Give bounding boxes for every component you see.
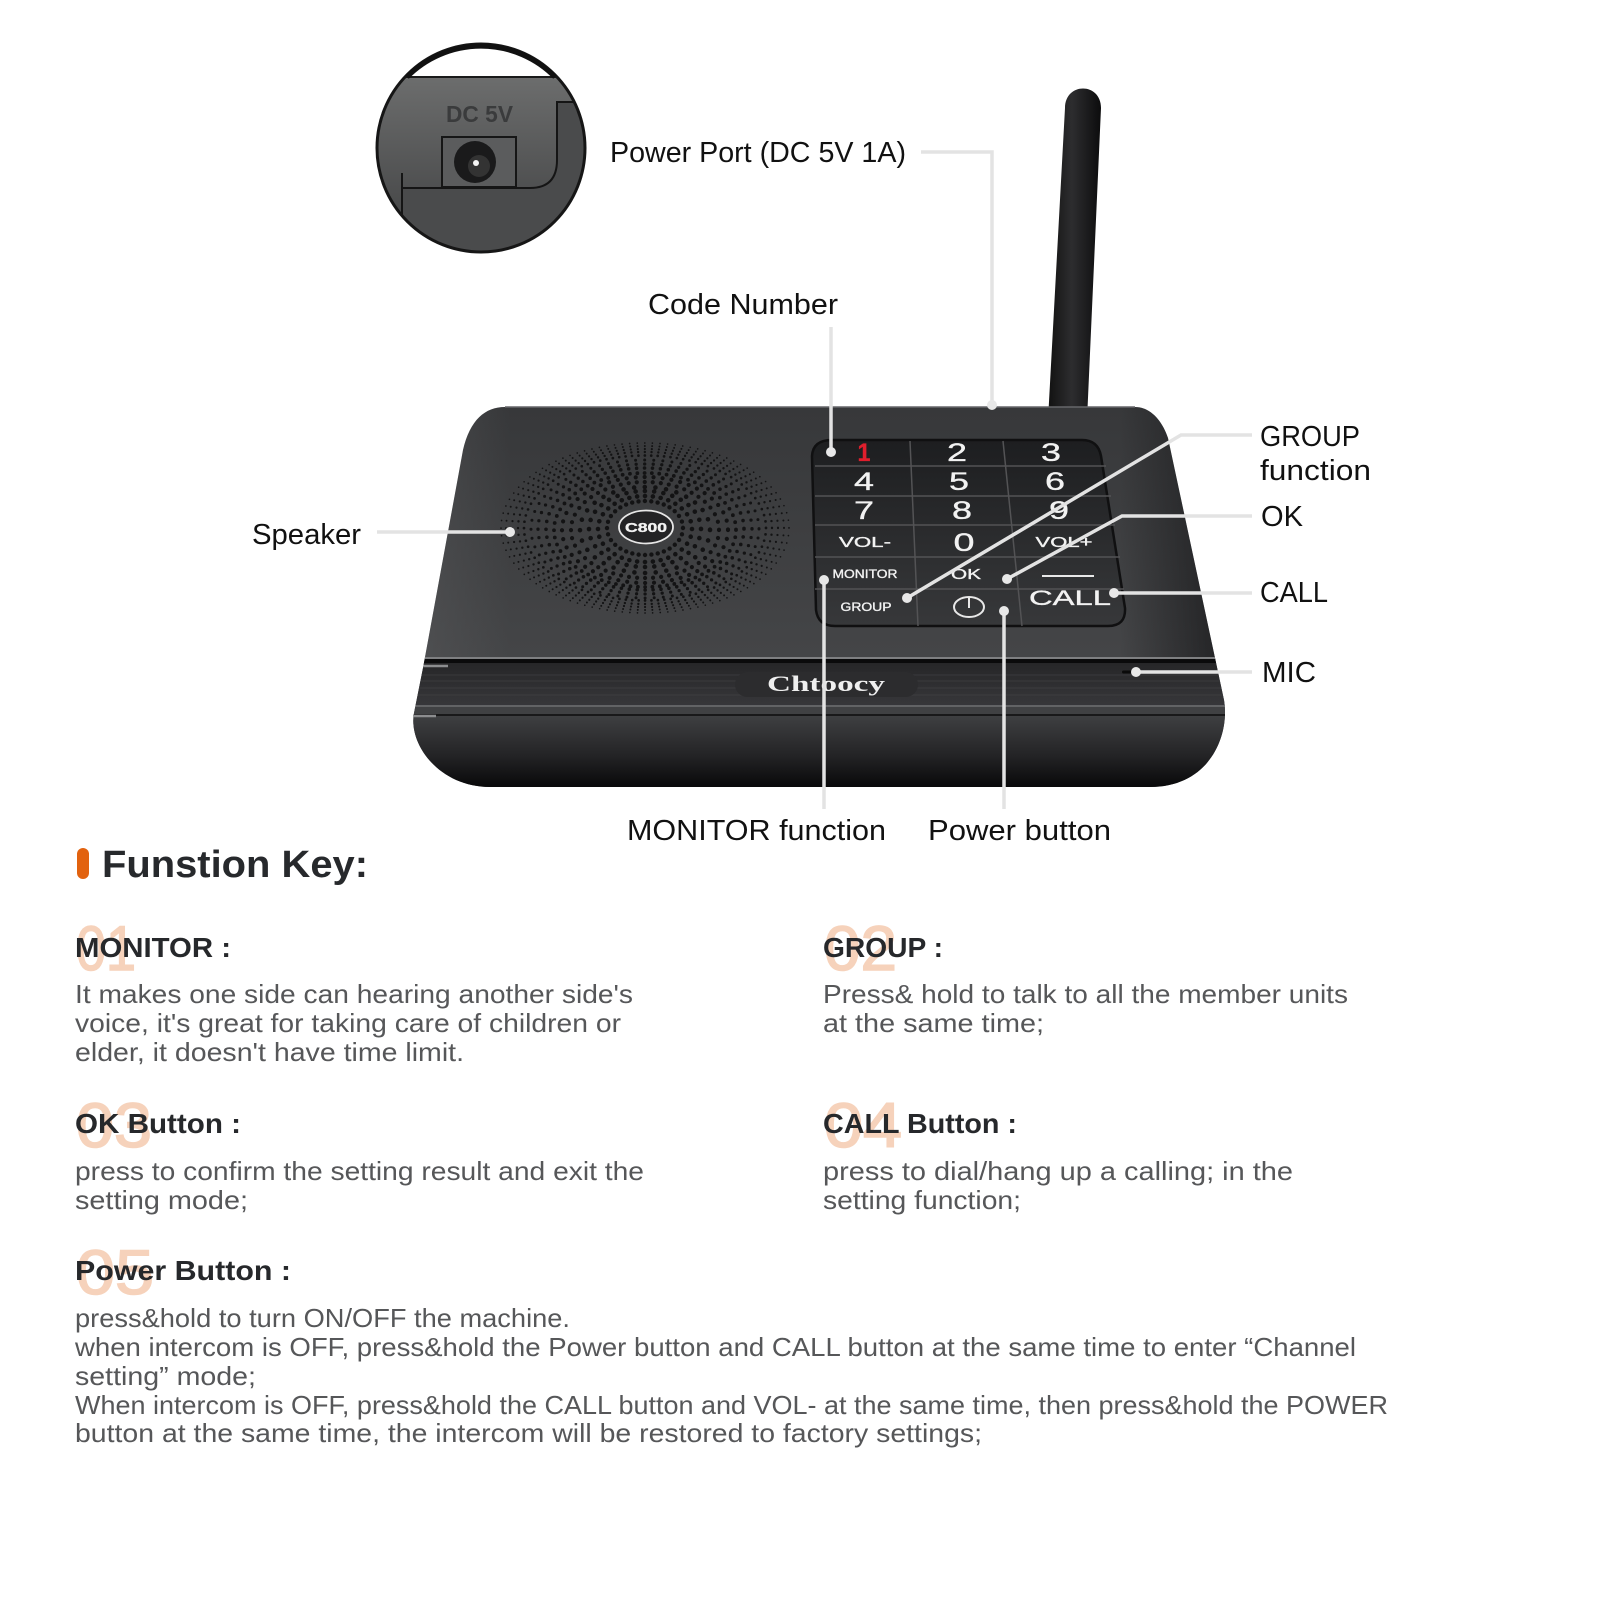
item 02: GROUP: at the same time;	[823, 1008, 1044, 1038]
item 05: Power Button: When intercom is OFF, press&hold the CALL button and VOL- at the same time, then press&hold the POWER	[75, 1390, 1388, 1420]
label: Power button: Power button	[928, 815, 1111, 847]
item 04: CALL Button: 04	[824, 1091, 902, 1161]
label: MIC: MIC	[1262, 657, 1316, 689]
item 03: OK Button: setting mode;	[75, 1185, 248, 1215]
keypad	[812, 439, 1125, 626]
keypad key labels: 1	[858, 439, 871, 467]
brand plate: Chtoocy	[767, 671, 885, 696]
label: MONITOR function: MONITOR function	[627, 815, 886, 847]
label: GROUP function	[1260, 421, 1371, 487]
item 05: Power Button: button at the same time, the intercom will be restored to factory settings;	[75, 1418, 982, 1448]
mic hole	[1122, 670, 1132, 674]
item 05: Power Button: 05	[76, 1238, 154, 1308]
item 01: MONITOR: voice, it's great for taking care of children or	[75, 1008, 621, 1038]
item 03: OK Button	[75, 1091, 644, 1215]
keypad key labels: 2	[947, 439, 967, 467]
item 02: GROUP	[823, 914, 1348, 1038]
C800 badge: C800	[625, 520, 667, 535]
C800 badge	[619, 510, 673, 544]
label: Power Port: Power Port (DC 5V 1A)	[610, 137, 906, 169]
item 04: CALL Button	[823, 1091, 1293, 1215]
leader: code number	[826, 327, 836, 457]
icon: power symbol	[954, 597, 984, 617]
keypad key labels: OK	[951, 566, 981, 583]
item 01: MONITOR: elder, it doesn't have time limit.	[75, 1037, 464, 1067]
keypad key labels: 8	[952, 497, 972, 525]
keypad key labels	[832, 439, 1111, 614]
item 02: GROUP: 02	[824, 914, 897, 984]
item 01: MONITOR: MONITOR :	[75, 932, 231, 963]
antenna	[1048, 88, 1101, 420]
item 03: OK Button: OK Button :	[75, 1108, 241, 1139]
leader: ok	[1002, 516, 1252, 584]
label: Code Number: Code Number	[648, 289, 838, 321]
keypad key labels: 4	[854, 468, 874, 496]
item 05: Power Button: Power Button :	[75, 1255, 291, 1286]
label: CALL: CALL	[1260, 577, 1328, 609]
keypad key labels: 9	[1049, 497, 1069, 525]
inset label: DC 5V: DC 5V	[446, 101, 514, 127]
keypad key labels: 3	[1041, 439, 1061, 467]
item 04: CALL Button: press to dial/hang up a calling; in the	[823, 1156, 1293, 1186]
item 03: OK Button: 03	[76, 1091, 152, 1161]
icon: DC jack	[442, 137, 516, 187]
intercom infographic	[75, 42, 1387, 1448]
keypad key labels: 7	[854, 497, 874, 525]
item 02: GROUP: Press& hold to talk to all the member units	[823, 979, 1348, 1009]
leader: power port	[921, 152, 997, 410]
label: OK: OK	[1261, 501, 1304, 533]
item 05: Power Button: when intercom is OFF, press&hold the Power button and CALL button at the same time to enter “Channel	[74, 1332, 1356, 1362]
brand plate	[735, 671, 918, 697]
item 02: GROUP: GROUP :	[823, 932, 943, 963]
item 03: OK Button: press to confirm the setting result and exit the	[75, 1156, 644, 1186]
item 01: MONITOR: 01	[76, 914, 136, 984]
keypad key labels: VOL-	[839, 534, 891, 551]
intercom device body	[400, 405, 1240, 790]
keypad key labels: GROUP	[840, 600, 892, 614]
leader: mic	[1131, 667, 1252, 677]
speaker grille	[501, 443, 789, 613]
item 01: MONITOR	[75, 914, 633, 1067]
keypad key labels: MONITOR	[832, 567, 898, 581]
label: GROUP function: function	[1260, 455, 1371, 487]
section heading: Funstion Key: Funstion Key:	[102, 844, 368, 886]
keypad key labels: 0	[954, 529, 974, 557]
label: Speaker: Speaker	[252, 519, 361, 551]
keypad key labels: CALL	[1029, 587, 1111, 610]
item 01: MONITOR: It makes one side can hearing another side's	[75, 979, 633, 1009]
label: GROUP function: GROUP	[1260, 421, 1360, 453]
leader: call	[1109, 588, 1252, 598]
leader: power button	[999, 606, 1009, 809]
item 04: CALL Button: CALL Button :	[823, 1108, 1017, 1139]
item 05: Power Button	[74, 1238, 1388, 1448]
leader: group	[902, 435, 1252, 603]
keypad key labels: VOL+	[1036, 534, 1093, 551]
item 04: CALL Button: setting function;	[823, 1185, 1021, 1215]
inset: power port close-up	[376, 42, 586, 254]
leader: monitor	[819, 575, 829, 809]
keypad key labels: 5	[949, 468, 969, 496]
item 05: Power Button: setting” mode;	[75, 1361, 256, 1391]
leader: speaker	[377, 527, 515, 537]
item 05: Power Button: press&hold to turn ON/OFF the machine.	[75, 1303, 570, 1333]
keypad key labels: 6	[1045, 468, 1065, 496]
